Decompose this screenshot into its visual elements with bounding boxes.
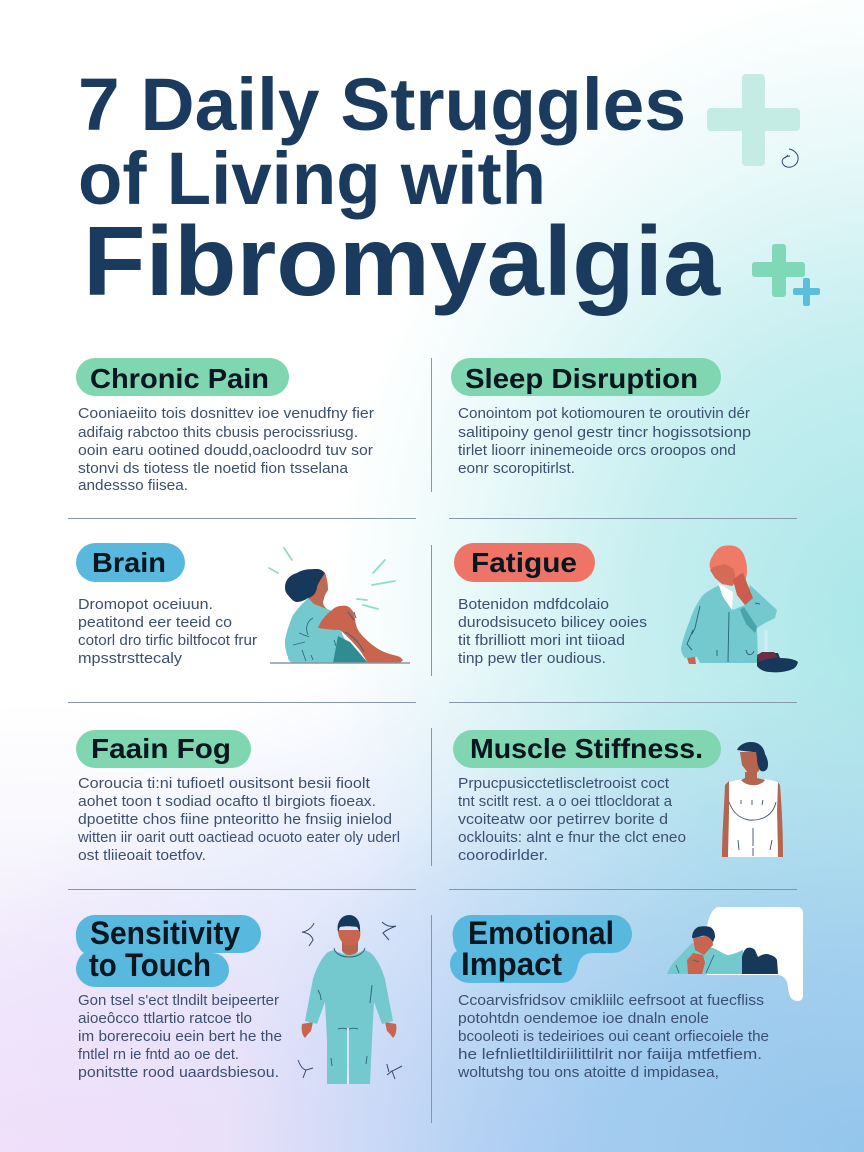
panel: emotional impact: [450, 907, 803, 1081]
icon: seated woman: [269, 548, 410, 663]
icon: tired person: [681, 545, 798, 672]
panel: muscle stiffness: [453, 730, 783, 864]
pill: fatigue: Fatigue: [471, 547, 577, 578]
text: muscle stiffness body: [458, 775, 686, 864]
pill: emotional impact: Emotional: [468, 915, 614, 951]
text: brain body: [78, 596, 257, 667]
icon: standing man: [298, 915, 402, 1084]
pill: muscle stiffness: [453, 730, 721, 768]
text: sleep disruption body: salitipoiny genol gestr tincr hogissotsionp: [458, 424, 751, 441]
text: sensitivity body: fntlel rn ie fntd ao oe det.: [78, 1046, 239, 1063]
title: of Living with: [78, 137, 546, 220]
panel: brain fog: [76, 730, 400, 864]
text: fatigue body: tinp pew tler oudious.: [458, 650, 606, 667]
text: fatigue body: durodsisuceto bilicey ooies: [458, 614, 647, 631]
pill: brain fog: [76, 730, 251, 768]
panel: brain: [76, 543, 410, 667]
text: chronic pain body: ooin earu ootined doudd,oacloodrd tuv sor: [78, 442, 373, 459]
text: brain body: Dromopot oceiuun.: [78, 596, 213, 613]
text: emotional impact body: Ccoarvisfridsov cmikliilc eefrsoot at fuecfliss: [458, 992, 764, 1009]
text: brain body: cotorl dro tirfic biltfocot frur: [78, 632, 257, 649]
text: brain fog body: aohet toon t sodiad ocafto tl birgiots fioeax.: [78, 793, 376, 810]
pill: chronic pain: [76, 358, 289, 396]
pill: brain: [76, 543, 185, 582]
text: sensitivity body: aioeôcco ttlartio ratcoe tlo: [78, 1010, 252, 1027]
text: chronic pain body: stonvi ds tiotess tle noetid fion tsselana: [78, 460, 349, 477]
text: sleep disruption body: [458, 405, 751, 477]
icon: small curl: [782, 149, 798, 167]
panel: fatigue: [454, 543, 798, 672]
text: brain fog body: ost tliieoait toetfov.: [78, 847, 206, 864]
pill: sleep disruption: Sleep Disruption: [465, 363, 698, 394]
text: brain body: peatitond eer teeid co: [78, 614, 232, 631]
text: muscle stiffness body: tnt scitlt rest. a o oei ttlocldorat a: [458, 793, 673, 810]
text: muscle stiffness body: vcoiteatw oor petirrev borite d: [458, 811, 668, 828]
text: sleep disruption body: Conointom pot kotiomouren te oroutivin dér: [458, 405, 750, 422]
text: sensitivity body: [78, 992, 282, 1081]
text: sensitivity body: ponitstte rood uaardsbiesou.: [78, 1064, 279, 1081]
pill: brain fog: Faain Fog: [91, 733, 231, 764]
pill: sensitivity to touch: [76, 915, 261, 987]
text: emotional impact body: bcooleoti is tedeirioes oui ceant orfiecoiele the: [458, 1028, 769, 1045]
text: emotional impact body: he lefnlietltildiriilittilrit nor faiija mtfetfiem.: [458, 1046, 762, 1063]
text: muscle stiffness body: coorodirlder.: [458, 847, 548, 864]
pill: chronic pain: Chronic Pain: [90, 363, 269, 394]
icon: blue plus: [793, 278, 820, 306]
text: emotional impact body: [457, 992, 769, 1081]
icon: green plus: [752, 244, 805, 297]
text: brain fog body: Coroucia ti:ni tufioetl ousitsont besii fioolt: [78, 775, 371, 792]
text: sensitivity body: im borerecoiu eein bert he the: [78, 1028, 282, 1045]
text: chronic pain body: Cooniaeiito tois dosnittev ioe venudfny fier: [78, 405, 374, 422]
pill: fatigue: [454, 543, 595, 582]
text: fatigue body: [458, 596, 647, 667]
text: brain fog body: [77, 775, 400, 864]
text: muscle stiffness body: ocklouits: alnt e fnur the clct eneo: [458, 829, 686, 846]
text: chronic pain body: andessso fiisea.: [78, 477, 188, 494]
text: chronic pain body: adifaig rabctoo thits cbusis perocissriusg.: [78, 424, 358, 441]
text: muscle stiffness body: Prpucpusicctetliscletrooist coct: [458, 775, 670, 792]
pill: emotional impact: Impact: [461, 946, 562, 982]
text: emotional impact body: potohtdn oendemoe ioe dnaln enole: [458, 1010, 709, 1027]
title: [78, 63, 722, 316]
icon: large pale plus: [707, 74, 800, 166]
pill: sensitivity to touch: Sensitivity: [90, 915, 240, 951]
icon: standing woman: [722, 742, 783, 857]
text: sleep disruption body: tirlet lioorr ininemeoide orcs oroopos ond: [458, 442, 736, 459]
text: fatigue body: Botenidon mdfdcolaio: [458, 596, 609, 613]
icon: white blob with resting person: [667, 907, 803, 1001]
title: 7 Daily Struggles: [78, 63, 686, 146]
text: chronic pain body: [78, 405, 374, 494]
panel: chronic pain: [76, 358, 374, 494]
text: sensitivity body: Gon tsel s'ect tlndilt beipeerter: [78, 992, 279, 1009]
panel: sleep disruption: [451, 358, 751, 477]
pill: brain: Brain: [92, 547, 166, 578]
pill: sensitivity to touch: to Touch: [89, 947, 211, 983]
title: Fibromyalgia: [83, 206, 722, 316]
text: sleep disruption body: eonr scoropitirlst.: [458, 460, 575, 477]
text: emotional impact body: woltutshg tou ons atoitte d impidasea,: [457, 1064, 719, 1081]
text: brain fog body: witten iir oarit outt oactiead ocuoto eater oly uderl: [77, 829, 400, 846]
pill: muscle stiffness: Muscle Stiffness.: [470, 733, 703, 764]
text: fatigue body: tit fbrilliott mori int tiioad: [458, 632, 625, 649]
text: brain fog body: dpoetitte chos fiine pnteoritto he fnsiig inielod: [78, 811, 392, 828]
text: brain body: mpsstrsttecaly: [78, 650, 183, 667]
panel: sensitivity to touch: [76, 915, 402, 1084]
pill: emotional impact: [450, 915, 632, 983]
pill: sleep disruption: [451, 358, 721, 396]
